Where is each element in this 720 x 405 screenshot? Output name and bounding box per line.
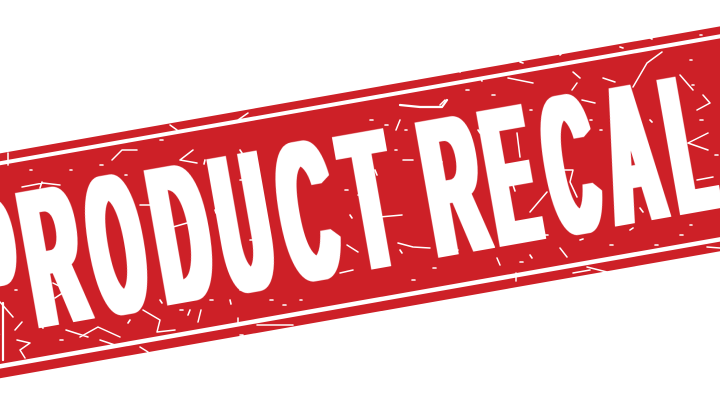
headline: PRODUCT RECALL: T	[329, 87, 410, 313]
headline: PRODUCT RECALL: R	[407, 71, 499, 299]
headline: PRODUCT RECALL: C	[528, 53, 613, 278]
headline: PRODUCT RECALL: D	[136, 119, 226, 347]
headline: PRODUCT RECALL: R	[8, 142, 99, 369]
headline: PRODUCT RECALL: C	[262, 97, 351, 325]
headline: PRODUCT RECALL: U	[200, 110, 287, 336]
headline: PRODUCT RECALL: A	[587, 42, 676, 268]
headline: PRODUCT RECALL: O	[72, 133, 161, 359]
headline: PRODUCT RECALL: E	[469, 63, 551, 289]
